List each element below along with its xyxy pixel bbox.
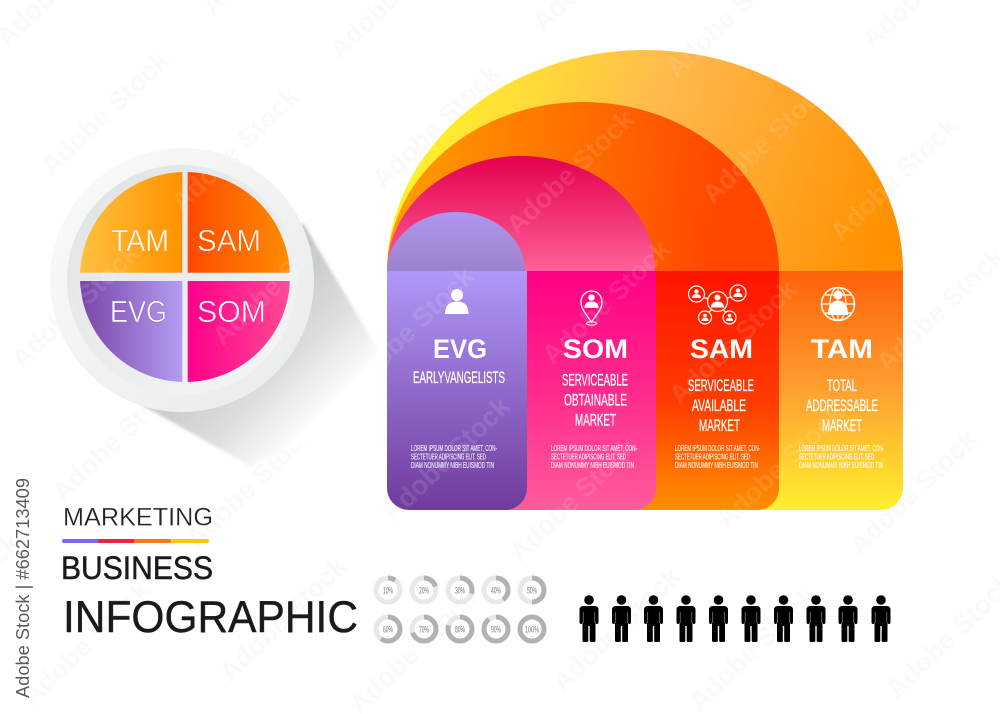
person 8 [806,595,826,642]
stock id vertical label: Adobe Stock | #662713409 [13,478,33,698]
person 6 [742,595,760,642]
watermark on white background: Adobe Stock [165,80,306,217]
donut 10% [376,578,400,602]
SOM heading: SOM [563,334,628,364]
TAM heading: TAM [811,334,873,364]
watermark on white background: Adobe Stock [46,370,187,507]
person 4 [676,595,696,642]
SOM body [500,271,656,510]
watermark on white background: Adobe Stock [5,237,146,374]
panel: TAM column and arch [387,50,903,510]
watermark over coloured panels: Adobe Stock [824,110,965,247]
person 2 [612,595,631,642]
watermark over coloured panels: Adobe Stock [696,72,837,209]
SOM body text: LOREM IPSUM DOLOR SIT AMET, CON- [551,444,637,453]
SOM subtitle: SERVICEABLE [562,372,628,390]
SOM subtitle [562,372,628,430]
donut 100%: 100% [525,624,539,636]
watermark on white background: Adobe Stock [35,44,176,181]
person 7 [774,595,793,642]
watermark over coloured panels: Adobe Stock [500,103,641,240]
watermark on white background: Adobe Stock [16,574,157,711]
TAM subtitle [806,377,878,435]
watermark over coloured panels: Adobe Stock [366,57,507,194]
EVG body [387,271,527,510]
donut 50% [520,578,544,602]
quadrant: SOM [188,281,290,382]
SOM subtitle: MARKET [575,412,616,430]
quadrant: EVG [80,281,182,382]
EVG body text: DIAM NONUMMY NIBH EUISMOD TIN [411,461,494,470]
watermark on white background: Adobe Stock [180,417,321,554]
donut 20%: 20% [419,586,429,596]
icon: people network [688,285,746,324]
SAM subtitle: AVAILABLE [692,397,746,415]
icon: globe with people [822,288,854,320]
donut 50%: 50% [527,586,537,596]
SAM body text: LOREM IPSUM DOLOR SIT AMET, CON- [675,444,760,453]
TAM body [500,271,903,510]
SAM subtitle: SERVICEABLE [688,377,754,395]
donut 70% [412,617,436,641]
four colour underline [62,539,209,543]
SAM heading: SAM [690,334,753,364]
badge outer ring [50,148,314,412]
donut 70%: 70% [419,624,429,636]
donut 40%: 40% [491,586,501,596]
SOM body text [551,444,637,470]
person 3 [644,595,663,642]
TAM subtitle: MARKET [822,417,862,435]
title: marketing: MARKETING [63,504,213,532]
icon: single person [445,289,468,314]
person 5 [709,595,728,642]
watermark over coloured panels: Adobe Stock [663,273,804,410]
donut 20% [412,578,436,602]
quadrant: EVG: EVG [110,294,167,329]
SAM body text [675,444,760,470]
SAM arch [387,102,779,271]
SAM body [500,271,779,510]
donut 100% [520,617,544,641]
watermark over coloured panels: Adobe Stock [206,214,347,351]
donut 10%: 10% [383,586,393,596]
SAM subtitle [688,377,754,435]
quadrant: SAM [188,172,290,273]
watermark over coloured panels: Adobe Stock [340,260,481,397]
watermark over coloured panels: Adobe Stock [710,397,851,534]
EVG body text [411,444,497,470]
title: infographic: INFOGRAPHIC [63,593,358,642]
TAM body text: LOREM IPSUM DOLOR SIT AMET, CON- [799,444,884,453]
percentage donut row [376,578,544,641]
SOM subtitle: OBTAINABLE [564,392,627,410]
person 9 [838,595,858,642]
panel: circular quadrant badge [50,148,314,412]
donut 80% [448,617,472,641]
watermark on white background: Adobe Stock [710,397,851,534]
EVG body text: SECTETUER ADIPISCING ELIT, SED [411,452,486,462]
donut 40% [484,578,508,602]
TAM body text: SECTETUER ADIPISCING ELIT, SED [799,452,874,462]
panel: SOM column and arch [387,156,656,510]
watermark on white background: Adobe Stock [843,423,984,560]
person 1 [580,595,598,642]
quadrant: TAM: TAM [111,223,169,258]
TAM subtitle: TOTAL [827,377,857,395]
EVG subtitle: EARLYVANGELISTS [413,369,505,387]
watermark on white background: Adobe Stock [683,580,824,714]
people pictogram row [580,595,890,642]
donut 30% [448,578,472,602]
EVG arch [387,212,525,271]
watermark over coloured panels: Adobe Stock [376,390,517,527]
TAM body text [799,444,884,470]
watermark on white background: Adobe Stock [376,390,517,527]
donut 60% [376,617,400,641]
long shadow of circle [133,223,378,466]
title: business: BUSINESS [61,550,213,586]
SOM body text: DIAM NONUMMY NIBH EUISMOD TIN [551,461,634,470]
watermark over coloured panels: Adobe Stock [46,370,187,507]
panel: EVG column and arch [387,212,527,510]
donut 30%: 30% [455,586,465,596]
EVG heading: EVG [433,334,487,364]
watermark on white background: Adobe Stock [366,57,507,194]
SAM body text: DIAM NONUMMY NIBH EUISMOD TIN [675,461,758,470]
TAM arch [387,50,903,271]
watermark on white background: Adobe Stock [546,560,687,697]
EVG body text: LOREM IPSUM DOLOR SIT AMET, CON- [411,444,497,453]
TAM body text: DIAM NONUMMY NIBH EUISMOD TIN [799,461,883,470]
watermark over coloured panels: Adobe Stock [165,80,306,217]
watermark on white background: Adobe Stock [213,550,354,687]
donut 80%: 80% [455,624,465,636]
donut 90% [484,617,508,641]
quadrant: SOM: SOM [197,294,266,329]
badge inner ring [67,165,297,395]
watermark over coloured panels: Adobe Stock [536,233,677,370]
person 10 [872,595,890,642]
SAM body text: SECTETUER ADIPISCING ELIT, SED [675,452,750,462]
watermark over coloured panels: Adobe Stock [503,430,644,567]
watermark on white background: Adobe Stock [824,110,965,247]
SOM arch [387,156,655,271]
TAM subtitle: ADDRESSABLE [806,397,878,415]
SAM subtitle: MARKET [699,417,740,435]
watermark over coloured panels: Adobe Stock [5,237,146,374]
donut 90%: 90% [491,624,501,636]
panel: SAM column and arch [387,102,779,510]
watermark on white background: Adobe Stock [503,430,644,567]
icon: location pin with person [581,291,602,325]
SOM body text: SECTETUER ADIPISCING ELIT, SED [551,452,626,462]
watermark over coloured panels [5,0,1000,567]
title block [61,504,358,642]
quadrant: TAM [80,172,182,273]
donut 60%: 60% [383,624,393,636]
quadrant: SAM: SAM [197,223,261,258]
